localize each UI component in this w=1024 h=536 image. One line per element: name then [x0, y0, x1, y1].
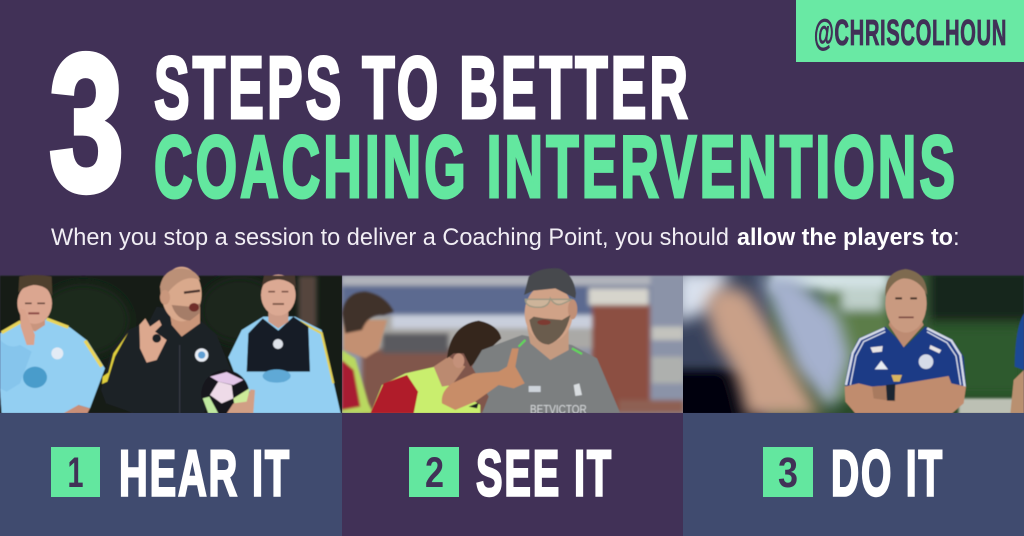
left player	[342, 292, 394, 413]
icon: number 3 badge: 3	[778, 449, 798, 497]
icon: number 2 badge: 2	[425, 449, 444, 497]
icon: number 2 badge	[409, 447, 459, 497]
coach	[472, 335, 620, 413]
subtitle: When you stop a session to deliver a Coaching Point, you should	[51, 224, 729, 251]
coach	[844, 326, 967, 387]
second player	[370, 367, 480, 413]
subtitle: allow the players to	[737, 224, 953, 251]
photo 2: coach in grey shirt and cap: BETVICTOR	[530, 402, 587, 416]
heading: see it: SEE IT	[476, 436, 613, 510]
right player	[228, 274, 341, 413]
photo 2: coach in grey shirt and cap	[342, 268, 684, 416]
heading: hear it: HEAR IT	[119, 436, 291, 510]
icon: number 1 badge	[51, 447, 100, 497]
handle tag	[796, 0, 1024, 62]
blurred foreground player	[683, 274, 858, 413]
icon: number 3 badge	[763, 447, 813, 497]
heading: do it: DO IT	[831, 436, 944, 510]
panel: step 3	[683, 413, 1024, 536]
photo 3: coach with folded arms	[683, 268, 1024, 413]
title	[154, 38, 958, 216]
left player	[0, 275, 105, 413]
centre coach	[101, 307, 232, 413]
panel: step 2	[342, 413, 683, 536]
icon: number 1 badge: 1	[68, 449, 84, 497]
title: STEPS TO BETTER	[154, 38, 691, 137]
panel: step 1	[0, 413, 342, 536]
subtitle: :	[953, 224, 960, 251]
photo 1: coach with ball	[0, 267, 342, 418]
big numeral 3: 3	[49, 14, 124, 232]
